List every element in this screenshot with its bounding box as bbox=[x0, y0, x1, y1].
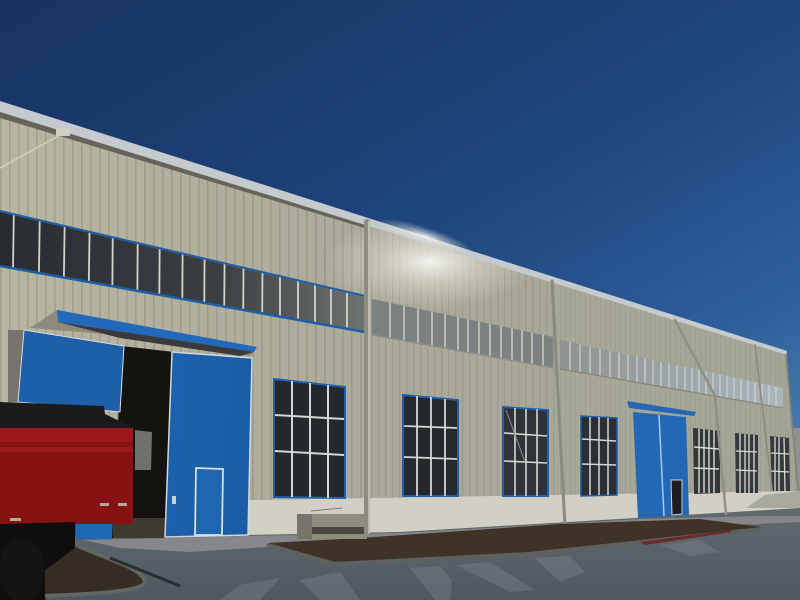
window 5 bbox=[693, 428, 720, 494]
left shaded wall by large door bbox=[8, 330, 24, 402]
right sliding blue door bbox=[165, 352, 252, 537]
window 7 bbox=[770, 436, 790, 491]
light pavement strip bbox=[84, 516, 800, 552]
window 2 bbox=[403, 395, 458, 496]
large door opening bbox=[112, 346, 174, 538]
window band left bbox=[0, 210, 364, 334]
window band center bbox=[372, 299, 553, 369]
roof fascia bbox=[0, 101, 787, 355]
fascia shadow line bbox=[0, 112, 368, 229]
blue base behind truck bbox=[76, 524, 112, 539]
distant building at right edge bbox=[792, 428, 800, 493]
white plinth wall bbox=[248, 491, 800, 535]
window 4 bbox=[581, 416, 617, 496]
window 3 bbox=[503, 407, 548, 496]
sun flare on wall bbox=[342, 229, 516, 304]
pavement sun streaks bbox=[220, 540, 720, 600]
truck bbox=[0, 402, 134, 600]
large door canopy bbox=[30, 310, 257, 356]
left planter bbox=[45, 546, 180, 596]
drain pipes bbox=[0, 134, 798, 535]
far blue door bbox=[633, 412, 689, 518]
pipe bracket bbox=[56, 128, 70, 136]
ground and road bbox=[0, 500, 800, 600]
left sliding blue door bbox=[18, 330, 124, 412]
far door canopy bbox=[627, 401, 696, 416]
plinth shadow at right bbox=[746, 491, 800, 508]
window band right bbox=[560, 340, 783, 408]
window 1 bbox=[274, 379, 345, 498]
main building wall bbox=[0, 110, 797, 500]
right soil planter with curb bbox=[266, 519, 764, 566]
sun glow on roofline bbox=[375, 212, 475, 260]
concrete bench bbox=[297, 508, 367, 539]
window 6 bbox=[735, 433, 758, 493]
